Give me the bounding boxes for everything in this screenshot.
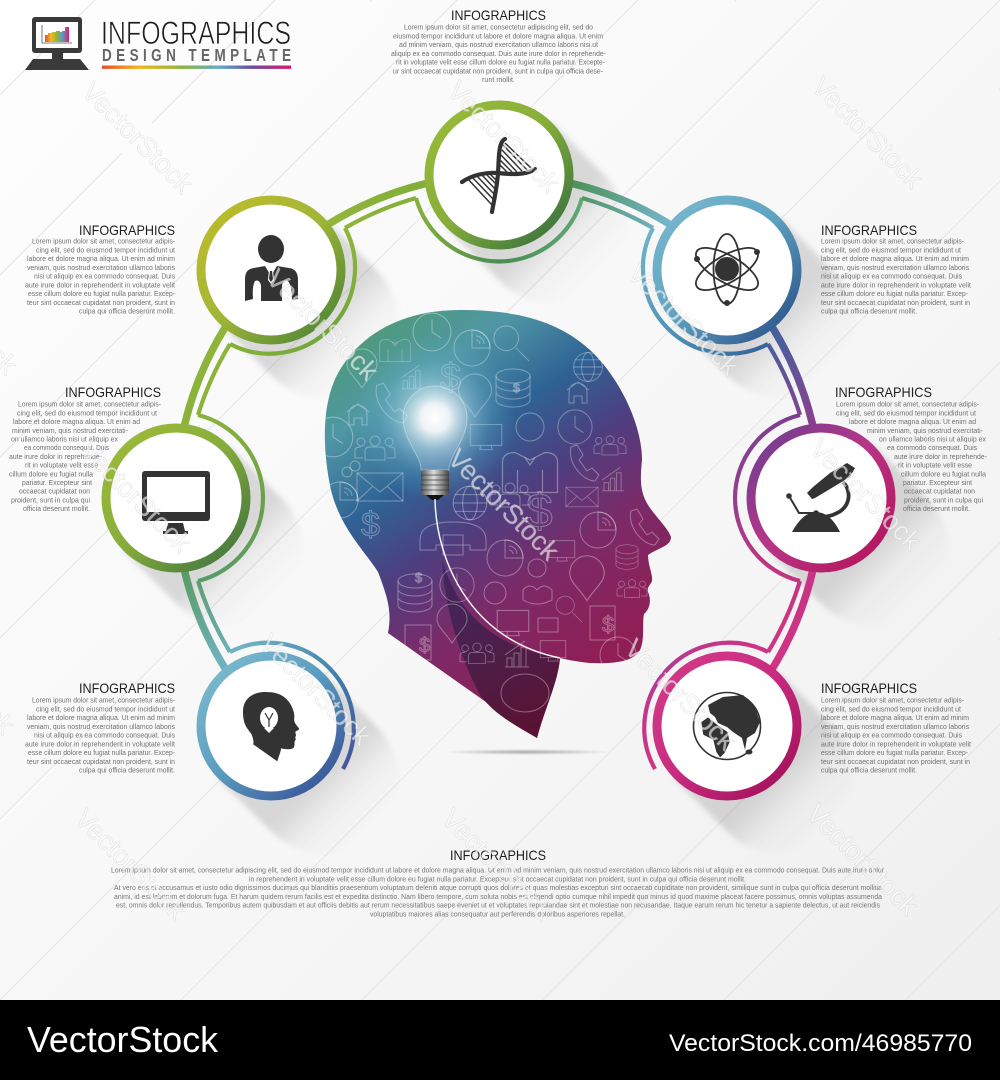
text block: top: runt mollit. [482, 75, 515, 84]
text block: bulb head: labore et dolore magna aliqua. Ut enim ad minim [27, 713, 175, 722]
text block: microscope: proident, sunt in culpa qui [904, 495, 983, 504]
line icon pattern inside head: $ [361, 506, 380, 544]
footer image id: VectorStock.com/46985770 [669, 1030, 972, 1057]
ring [746, 424, 896, 572]
connector: thick arc segments [176, 175, 821, 726]
text block: globe: esse cillum dolore eu fugiat nulla pariatur. Excep- [821, 748, 968, 757]
watermarks: VectorStock [442, 443, 565, 567]
text block: atom: labore et dolore magna aliqua. Ut enim ad minim [821, 254, 969, 263]
text block: globe: cing elit, sed do eiusmod tempor incididunt ut [821, 704, 961, 713]
panel: person node [196, 196, 346, 344]
text block: atom: veniam, quis nostrud exercitation ullamco laboris [821, 263, 969, 272]
light bulb wire [435, 499, 560, 658]
text block: globe: teur sint occaecat cupidatat non proident, sunt in [821, 757, 970, 766]
text block: person: veniam, quis nostrud exercitation ullamco laboris [27, 263, 175, 272]
line icon pattern inside head [313, 313, 659, 712]
watermarks: VectorStock [442, 75, 565, 199]
ring [102, 424, 250, 572]
dark neck fold [442, 560, 560, 738]
footer band [0, 1000, 1000, 1080]
panel: microscope node [746, 424, 896, 572]
text block: microscope: ea commodo consequat. Duis [887, 443, 977, 452]
text block: top: Lorem ipsum dolor sit amet, consectetur adipiscing elit, sed do [404, 23, 593, 32]
text block: bulb head: aute irure dolor in reprehenderit in voluptate velit [25, 739, 175, 748]
text block: microscope: officia deserunt mollit. [903, 504, 970, 513]
text block: bulb head [25, 680, 175, 775]
text block: monitor: labore et dolore magna aliqua. Ut enim ad [13, 417, 140, 426]
text block: microscope: cillum dolore eu fugiat nulla [901, 469, 987, 478]
long shadows of the circles [123, 122, 949, 854]
text block: globe: veniam, quis nostrud exercitation ullamco laboris [821, 722, 969, 731]
text block: bulb head: culpa qui officia deserunt mollit. [79, 766, 175, 775]
text block: globe: culpa qui officia deserunt mollit. [821, 766, 917, 775]
panel: globe node [652, 652, 802, 800]
text block: bulb head: Lorem ipsum dolor sit amet, consectetur adipis- [32, 696, 175, 705]
text block: microscope: rit in voluptate velit esse [898, 461, 972, 470]
text block: person: teur sint occaecat cupidatat non proident, sunt in [27, 298, 175, 307]
watermarks: VectorStock [261, 263, 384, 387]
text block: microscope: pariatur. Excepteur sint [903, 478, 972, 487]
text block: globe: aute irure dolor in reprehenderit in voluptate velit [821, 739, 971, 748]
text block: bulb head: veniam, quis nostrud exercitation ullamco laboris [27, 722, 175, 731]
line icon pattern inside head: $ [513, 381, 520, 395]
icon: head with bulb [243, 692, 299, 761]
text block: atom: esse cillum dolore eu fugiat nulla pariatur. Excep- [821, 289, 968, 298]
text block: atom [821, 222, 971, 316]
rainbow bar [102, 66, 291, 69]
line icon pattern inside head: $ [440, 357, 461, 399]
text block: globe: INFOGRAPHICS [821, 680, 917, 696]
line icon pattern inside head: $ [419, 635, 430, 657]
title [101, 15, 291, 69]
text block: top: INFOGRAPHICS [451, 7, 546, 23]
text block: atom: aute irure dolor in reprehenderit in voluptate velit [821, 280, 971, 289]
text block: person: nisi ut aliquip ex ea commodo consequat. Duis [34, 272, 175, 281]
text block: globe: nisi ut aliquip ex ea commodo consequat. Duis [821, 731, 962, 740]
icon: business person [245, 235, 298, 301]
subtitle: DESIGN TEMPLATE [102, 46, 291, 66]
icon: microscope [786, 463, 855, 532]
text block: microscope: labore et dolore magna aliqua. Ut enim ad [849, 417, 976, 426]
text block: monitor: Lorem ipsum dolor sit amet, consectetur adipis- [18, 400, 161, 409]
line icon pattern inside head: $ [602, 612, 614, 637]
text block: person: esse cillum dolore eu fugiat nulla pariatur. Excep- [28, 289, 175, 298]
text block: monitor: occaecat cupidatat non [19, 487, 90, 496]
text block: microscope: occaecat cupidatat non [904, 487, 975, 496]
text block: microscope: INFOGRAPHICS [835, 384, 932, 400]
ring [652, 196, 802, 344]
panel: atom node [652, 196, 802, 344]
head fill [325, 310, 671, 738]
text block: microscope: minim veniam, quis nostrud exercitati- [867, 426, 983, 435]
text block: bottom: voluptatibus maiores alias consequatur aut perferendis doloribus asperiores repellat. [370, 911, 625, 918]
connector: thin wrap line around circles [198, 198, 800, 769]
ring [196, 196, 346, 344]
line icon pattern inside head: $ [526, 485, 553, 538]
text block: atom: nisi ut aliquip ex ea commodo consequat. Duis [821, 272, 962, 281]
ring [652, 652, 802, 800]
ring [196, 652, 346, 800]
text block: monitor: cillum dolore eu fugiat nulla [9, 469, 94, 478]
text block: monitor: on ullamco laboris nisi ut aliquip ex [11, 434, 118, 444]
text block: person: aute irure dolor in reprehenderit in voluptate velit [25, 280, 175, 289]
text block: atom: culpa qui officia deserunt mollit. [821, 307, 917, 316]
text block: globe: Lorem ipsum dolor sit amet, consectetur adipis- [821, 696, 964, 705]
watermarks: VectorStock [801, 798, 924, 922]
panel: bulb head node [196, 652, 346, 800]
text block: top: ur sint occaecat cupidatat non proident, sunt in culpa qui officia dese- [393, 66, 603, 75]
text block: monitor [9, 384, 161, 513]
text block: monitor: proident, sunt in culpa qui [11, 495, 90, 504]
text block: top: aliquip ex ea commodo consequat. Duis aute irure dolor in reprehende- [391, 49, 606, 58]
floor shadow under head [443, 749, 611, 755]
text block: monitor: ea commodo consequat. Duis [24, 443, 109, 452]
text block: bulb head: cing elit, sed do eiusmod tempor incididunt ut [36, 704, 175, 713]
icon: dna helix [462, 139, 535, 212]
central head silhouette with light bulb [313, 310, 671, 738]
text block: bulb head: esse cillum dolore eu fugiat nulla pariatur. Excep- [28, 748, 175, 757]
text block: top [391, 7, 606, 84]
watermarks: VectorStock [76, 76, 199, 200]
watermarks: VectorStock [804, 433, 927, 557]
text block: microscope: on ullamco laboris nisi ut aliquip ex [879, 434, 986, 444]
text block: top: eiusmod tempor incididunt ut labore et dolore magna aliqua. Ut enim [393, 31, 603, 40]
icon: atom [690, 234, 764, 306]
icon: monitor [142, 471, 210, 534]
text block: monitor: rit in voluptate velit esse [25, 461, 98, 470]
watermarks: VectorStock [254, 628, 377, 752]
text block: atom: teur sint occaecat cupidatat non proident, sunt in [821, 298, 970, 307]
text block: monitor: INFOGRAPHICS [65, 384, 161, 400]
text block: bottom: At vero eos et accusamus et iusto odio dignissimos ducimus qui blanditiis praesentium voluptatum deleniti atque corrupti quos dolores et quas molestias excepturi sint occaecati cupiditate non provident, similique sunt in culpa qui officia deserunt mollitia [114, 885, 882, 892]
watermarks: VectorStock [806, 71, 929, 195]
footer brand: VectorStock [27, 1019, 219, 1060]
text block: monitor: minim veniam, quis nostrud exercitati- [12, 426, 128, 435]
line icon pattern inside head: $ [415, 570, 423, 585]
text block: person: culpa qui officia deserunt mollit. [79, 307, 175, 316]
text block: person [25, 222, 175, 316]
panel: dna node [424, 100, 574, 250]
text block: person: labore et dolore magna aliqua. Ut enim ad minim [27, 254, 175, 263]
text block: monitor: cing elit, sed do eiusmod tempor incididunt ut [17, 408, 157, 417]
text block: atom: INFOGRAPHICS [821, 222, 917, 238]
watermarks: VectorStock [619, 633, 742, 757]
text block: atom: Lorem ipsum dolor sit amet, consectetur adipis- [821, 237, 964, 246]
text block: monitor: pariatur. Excepteur sint [22, 478, 92, 487]
text block: bottom: est, omnis dolor repellendus. Temporibus autem quibusdam et aut officiis debitis aut rerum necessitatibus saepe eveniet ut et voluptates repudiandae sint et molestiae non recusandae. Itaque earum rerum hic tenetur a sapiente delectus, ut aut reiciendis [116, 902, 880, 910]
icon: light bulb [403, 386, 467, 500]
text block: atom: cing elit, sed do eiusmod tempor incididunt ut [821, 245, 961, 254]
text block: bottom: INFOGRAPHICS [450, 847, 546, 863]
text block: top: rit in voluptate velit esse cillum dolore eu fugiat nulla pariatur. Excepte- [396, 58, 605, 67]
text block: microscope: cing elit, sed do eiusmod tempor incididunt ut [836, 408, 976, 417]
title line: infographics: INFOGRAPHICS [101, 15, 291, 51]
text block: person: INFOGRAPHICS [79, 222, 175, 238]
watermarks: VectorStock [74, 435, 197, 559]
text block: microscope: aute irure dolor in reprehende- [894, 452, 987, 461]
watermarks: VectorStock [622, 258, 745, 382]
watermarks: VectorStock [436, 803, 559, 927]
logo: monitor icon with chart [25, 17, 89, 70]
icon: globe [694, 692, 760, 760]
text block: top: ad minim veniam, quis nostrud exercitation ullamco laboris nisi ut [399, 40, 598, 49]
text block: person: Lorem ipsum dolor sit amet, consectetur adipis- [32, 237, 175, 246]
text block: monitor: officia deserunt mollit. [23, 504, 90, 513]
text block: person: cing elit, sed do eiusmod tempor incididunt ut [36, 245, 175, 254]
text block: monitor: aute irure dolor in reprehende- [9, 452, 102, 461]
watermarks: VectorStock [69, 803, 192, 927]
text block: bulb head: INFOGRAPHICS [79, 680, 175, 696]
light glow [353, 336, 517, 500]
ring [424, 100, 574, 250]
text block: globe: labore et dolore magna aliqua. Ut enim ad minim [821, 713, 969, 722]
text block: bottom: animi, id est laborum et dolorum fuga. Et harum quidem rerum facilis est et expedita distinctio. Nam libero tempore, cum soluta nobis est eligendi optio cumque nihil impedit quo minus id quod maxime placeat facere possimus, omnis voluptas assumenda [114, 894, 882, 901]
text block: globe [821, 680, 971, 775]
text block: bulb head: teur sint occaecat cupidatat non proident, sunt in [27, 757, 175, 766]
text block: bottom: in reprehenderit in voluptate velit esse cillum dolore eu fugiat nulla pariatur. Excepteur sint occaecat cupidatat non proident, sunt in culpa qui officia deserunt mollit. [249, 876, 746, 883]
text block: bottom [111, 847, 885, 918]
text block: bulb head: nisi ut aliquip ex ea commodo consequat. Duis [34, 731, 175, 740]
text block: bottom: Lorem ipsum dolor sit amet, consectetur adipiscing elit, sed do eiusmod tempor incididunt ut labore et dolore magna aliqua. Ut enim ad minim veniam, quis nostrud exercitation ullamco laboris nisi ut aliquip ex ea commodo consequat. Duis aute irure dolor [111, 868, 885, 874]
panel: monitor node [102, 424, 250, 572]
text block: microscope [835, 384, 987, 513]
text block: microscope: Lorem ipsum dolor sit amet, consectetur adipis- [836, 400, 979, 409]
